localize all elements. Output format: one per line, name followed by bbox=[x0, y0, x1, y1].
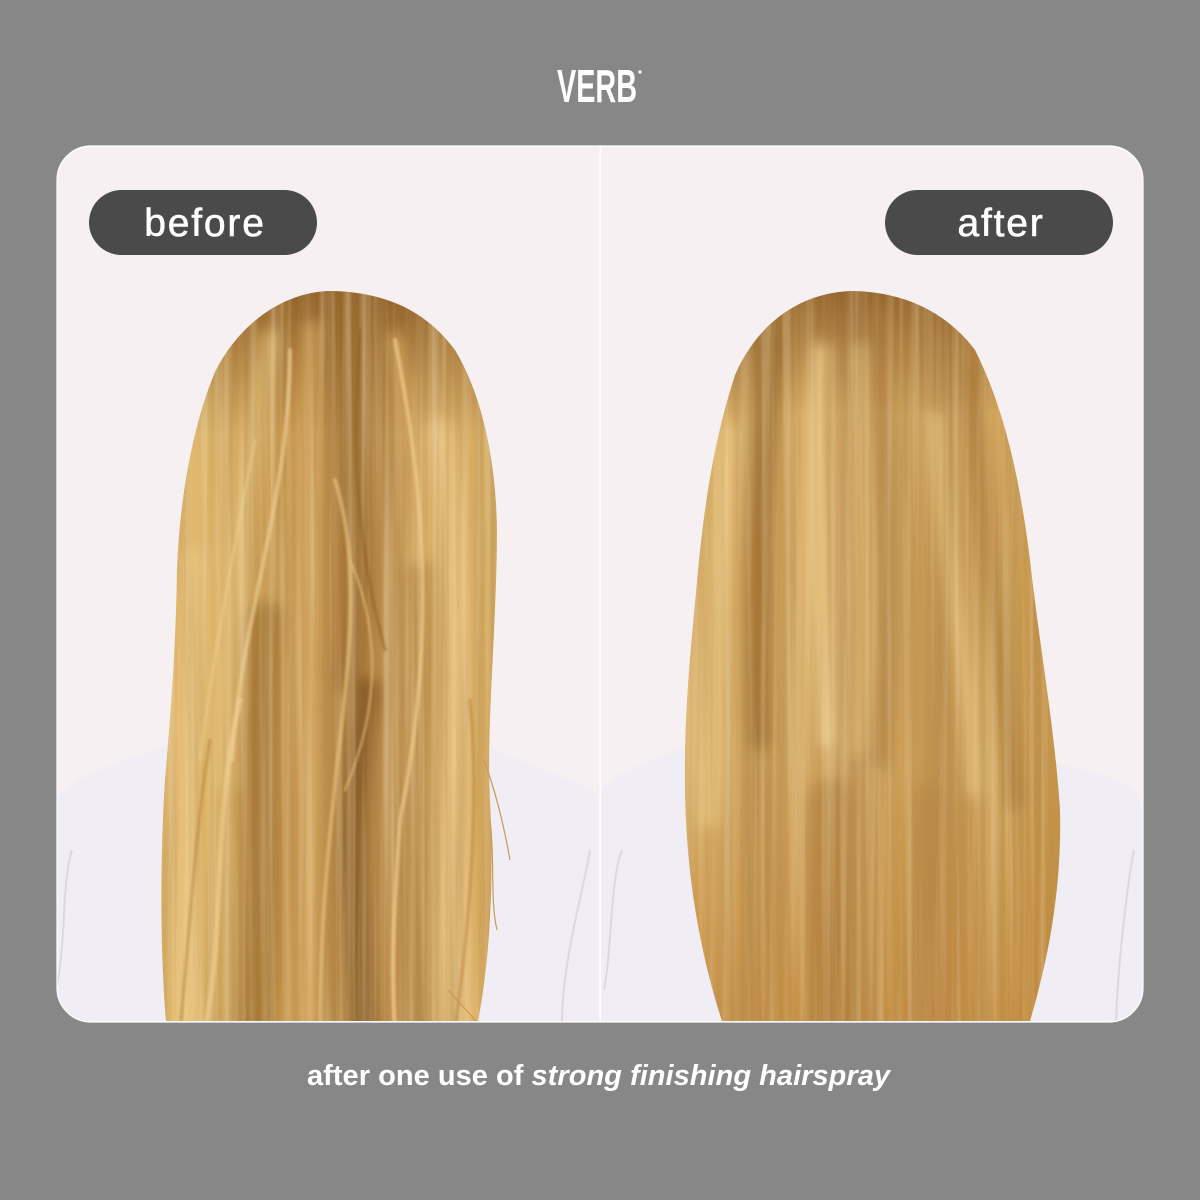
center divider bbox=[600, 146, 601, 1022]
caption: after one use of strong finishing hairspray bbox=[307, 1060, 892, 1092]
panel: after photo bbox=[601, 285, 1143, 1030]
shirt: after bbox=[601, 745, 1143, 1022]
badge: after bbox=[885, 190, 1113, 255]
flyaway strands: before bbox=[448, 760, 510, 1021]
shirt: before bbox=[57, 742, 599, 1022]
logo: VERB: VERB bbox=[557, 60, 637, 112]
badge: before bbox=[89, 190, 317, 255]
hair: after bbox=[680, 285, 1070, 1030]
badge: before: before bbox=[144, 202, 266, 245]
badge: after: after bbox=[957, 202, 1045, 245]
panel: comparison card bbox=[57, 146, 1143, 1030]
logo: VERB bbox=[557, 60, 642, 112]
card outline bbox=[57, 146, 1143, 1022]
hair: before bbox=[150, 280, 510, 1030]
panel: before photo bbox=[57, 280, 599, 1030]
